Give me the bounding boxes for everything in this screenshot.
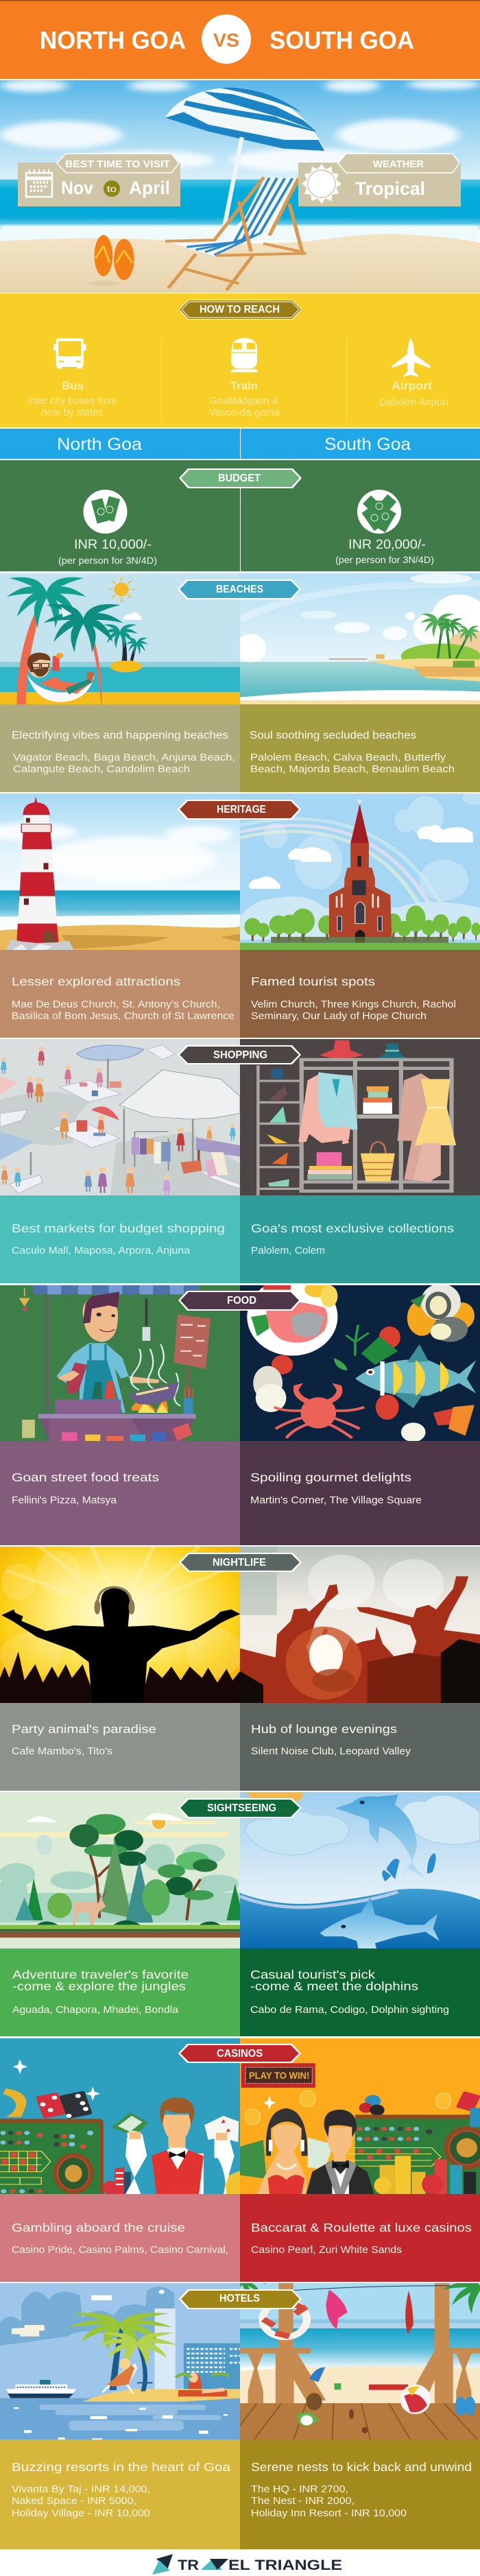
text panel: north food (0, 1441, 240, 1545)
text panel: north shopping: Best markets for budget shopping (12, 1221, 225, 1235)
crowd silhouettes (240, 1576, 480, 1703)
illustration: dj silhouette (0, 1547, 240, 1703)
illustration: resort and cruise ship (0, 2283, 240, 2440)
text panel: north hotels: Vivanta By Taj - INR 14,000, (12, 2484, 150, 2495)
church (329, 799, 392, 944)
text panel: south food (240, 1441, 480, 1545)
text: bus (27, 379, 117, 418)
money and cards (112, 2112, 239, 2142)
text panel: south heritage (240, 950, 480, 1038)
illustration: lounge crowd (240, 1547, 480, 1703)
dice (456, 2091, 480, 2127)
section: budget (0, 460, 480, 571)
awning (33, 1285, 199, 1295)
umbrella (165, 87, 324, 151)
text panel: north nightlife: Cafe Mambo's, Tito's (12, 1746, 112, 1757)
horseshoe (3, 2088, 26, 2117)
icon: calendar (26, 169, 52, 197)
info box: weather: Tropical (355, 178, 425, 199)
text: north budget (58, 538, 157, 566)
text: bus: Bus (62, 379, 84, 392)
illustration: lighthouse on beach (0, 794, 240, 950)
banner: hotels (179, 2289, 302, 2309)
hanging clothes (405, 2291, 413, 2334)
text panel: south sightseeing: Cabo de Rama, Codigo, Dolphin sighting (250, 2005, 449, 2016)
text panel: north food: Goan street food treats (12, 1470, 159, 1484)
text panel: south nightlife: Hub of lounge evenings (251, 1722, 397, 1736)
table (348, 2114, 480, 2194)
coins (245, 2090, 451, 2125)
flip flops (455, 2396, 475, 2416)
vendor (57, 1291, 159, 1413)
text panel: south heritage: Velim Church, Three Kings Church, Rachol (251, 999, 456, 1010)
sun (108, 577, 135, 602)
counter (22, 1400, 196, 1441)
banner: sightseeing (178, 1798, 302, 1818)
wheel (444, 2126, 480, 2169)
clothes rack (132, 1132, 171, 1171)
mats and goods (0, 1045, 240, 1193)
banner: heritage (178, 800, 301, 820)
heading: south goa: South Goa (324, 435, 411, 454)
text: train (209, 379, 280, 418)
text: airport: Dabolim Airport (379, 397, 448, 408)
deck floor (240, 2403, 480, 2440)
illustration: street market (0, 1039, 240, 1195)
text panel: south food: Spoiling gourmet delights (250, 1470, 411, 1484)
banner: shopping: SHOPPING (213, 1049, 267, 1061)
text panel: south sightseeing: -come & meet the dolphins (250, 1979, 418, 1993)
sand island (83, 2389, 240, 2402)
splash (382, 1853, 436, 1881)
wok and flames (128, 1382, 179, 1413)
text panel: north casinos: Casino Pride, Casino Palms, Casino Carnival, (12, 2245, 228, 2256)
text panel: north beaches (0, 704, 240, 792)
text panel: north hotels: Naked Space - INR 5000, (12, 2496, 136, 2507)
banner: hotels: HOTELS (219, 2293, 260, 2304)
balusters and posts (240, 2283, 480, 2403)
banner: sightseeing: SIGHTSEEING (207, 1802, 276, 1814)
hats (320, 1040, 407, 1058)
text panel: south heritage: Seminary, Our Lady of Hope Church (251, 1011, 427, 1022)
steam (131, 1344, 180, 1406)
text: airport (379, 379, 448, 408)
folded clothes and bag (307, 1142, 395, 1182)
chips (103, 2167, 240, 2195)
section: casinos (0, 2038, 480, 2282)
text panel: south sightseeing (240, 1948, 480, 2036)
tomatoes and mozzarella (253, 1355, 399, 1420)
deer (73, 1889, 106, 1925)
text: airport: Airport (392, 379, 432, 392)
trees (244, 905, 480, 942)
text: north budget: (per person for 3N/4D) (58, 555, 157, 566)
icon: bus (53, 337, 431, 377)
man (306, 2110, 374, 2194)
banner: nightlife: NIGHTLIFE (213, 1557, 266, 1569)
coconut trees (7, 568, 123, 704)
section: shopping (0, 1039, 480, 1283)
info box: weather (298, 154, 461, 206)
pier (329, 654, 385, 659)
text panel: north food: Fellini's Pizza, Matsya (12, 1495, 117, 1506)
text panel: south shopping (240, 1195, 480, 1283)
icon: sun (302, 164, 341, 204)
coin and chip stacks (374, 2156, 476, 2195)
illustration: church with rainbow (240, 794, 480, 950)
text: bus: near by states (41, 407, 103, 418)
text: bus: Inter city buses from (27, 396, 117, 407)
text panel: south beaches: Beach, Majorda Beach, Benaulim Beach (250, 764, 455, 775)
heading: north goa: North Goa (57, 435, 142, 454)
text panel: south shopping: Goa's most exclusive collections (251, 1221, 454, 1235)
text: train: GoaMadgaon & (210, 396, 278, 407)
chip stack (359, 2095, 385, 2116)
woman (257, 2108, 308, 2194)
mussels and lemons (407, 1284, 475, 1342)
flip flops (95, 235, 134, 280)
text panel: north beaches: Vagator Beach, Baga Beach, Anjuna Beach, (13, 752, 235, 763)
banner: casinos: CASINOS (217, 2048, 263, 2060)
island (368, 609, 480, 681)
illustration: dolphins (240, 1792, 480, 1948)
sun hat (326, 2289, 348, 2330)
logo: travel triangle (152, 2554, 342, 2575)
banner: casinos (178, 2044, 301, 2063)
ship (6, 2380, 77, 2398)
section: nightlife (0, 1547, 480, 1791)
text panel: north beaches: Electrifying vibes and happening beaches (12, 730, 228, 741)
dj (1, 1587, 240, 1703)
illustration: secluded beach (240, 573, 480, 704)
banner: food: FOOD (227, 1295, 256, 1307)
text panel: north sightseeing (0, 1948, 240, 2036)
beach ball (400, 2385, 431, 2414)
wardrobe frame (258, 1060, 451, 1195)
banner: how to reach (179, 300, 302, 320)
text panel: north heritage: Lesser explored attractions (12, 975, 180, 988)
icon: money north (84, 490, 128, 534)
illustration: street food vendor (0, 1285, 240, 1441)
section: beaches (0, 568, 480, 792)
banner: nightlife (179, 1553, 302, 1572)
main trees (15, 1814, 240, 1922)
bunting (62, 1423, 192, 1441)
banner: beaches (178, 580, 301, 599)
sea (0, 2398, 240, 2440)
section: how to reach (0, 294, 480, 427)
tomato and herbs (334, 1325, 400, 1370)
dice (36, 2091, 93, 2119)
logo: travel triangle: TR (178, 2557, 199, 2573)
background trees (0, 1844, 240, 1922)
sunbathers (103, 2359, 230, 2396)
sea (240, 1889, 480, 1948)
banner: food (178, 1291, 301, 1311)
banner: budget (179, 468, 302, 488)
section: sightseeing (0, 1792, 480, 2036)
illustration: wardrobe (240, 1039, 480, 1195)
text panel: north casinos (0, 2194, 240, 2282)
sparkles (13, 2060, 100, 2101)
info box: best time to visit: to (107, 184, 117, 194)
text panel: south casinos: Baccarat & Roulette at luxe casinos (251, 2221, 472, 2234)
hammock with man (27, 653, 95, 702)
text: south budget: INR 20,000/- (348, 538, 426, 552)
section: hotels (0, 2267, 480, 2549)
ground (0, 1920, 240, 1948)
text panel: south hotels: Holiday Inn Resort - INR 10,000 (251, 2508, 407, 2519)
text panel: north nightlife: Party animal's paradise (12, 1722, 156, 1736)
info box: best time to visit (18, 154, 180, 206)
text panel: south beaches (240, 704, 480, 792)
banner: beaches: BEACHES (216, 584, 263, 595)
text panel: south shopping: Palolem, Colem (251, 1245, 325, 1256)
clouds (245, 1796, 480, 1855)
text panel: south nightlife (240, 1703, 480, 1791)
shoppers (1, 1047, 236, 1196)
life buoy (263, 2302, 307, 2337)
palm leaves (217, 2267, 480, 2314)
text panel: south nightlife: Silent Noise Club, Leopard Valley (251, 1746, 411, 1757)
illustration: man in hammock under palms (0, 573, 240, 704)
banner: how to reach: HOW TO REACH (200, 304, 280, 315)
plate with salmon (247, 1278, 337, 1356)
text panel: south hotels (240, 2440, 480, 2549)
cloud shapes (0, 2287, 174, 2346)
text: south budget: (per person for 3N/4D) (335, 554, 434, 565)
crab (293, 1383, 342, 1429)
beach items (298, 2368, 408, 2426)
dealer (125, 2097, 235, 2194)
play to win sign (241, 2063, 315, 2088)
illustration: casino couple (240, 2038, 480, 2194)
text panel: south hotels: The Nest - INR 2000, (251, 2496, 355, 2507)
jacket and coat (298, 1072, 357, 1144)
hero beach scene (0, 80, 480, 293)
banner: shopping (178, 1045, 301, 1064)
illustration: casino dealer (0, 2038, 240, 2194)
text panel: south sightseeing: Casual tourist's pick (250, 1968, 375, 1981)
text panel: north sightseeing: Adventure traveler's favorite (12, 1968, 189, 1981)
text panel: north heritage (0, 950, 240, 1038)
dress and coat (397, 1073, 456, 1182)
text panel: north nightlife (0, 1703, 240, 1791)
text panel: north hotels: Holiday Village - INR 10,000 (12, 2508, 150, 2519)
info box: best time to visit: April (129, 178, 170, 198)
sign (174, 1315, 211, 1397)
illustration: beach from balcony (240, 2283, 480, 2440)
icon: airplane (392, 338, 430, 377)
vs badge (202, 14, 251, 64)
title: south goa: SOUTH GOA (269, 26, 414, 54)
logo: travel triangle: EL TRIANGLE (228, 2557, 342, 2573)
text: south budget (335, 538, 434, 565)
text panel: south heritage: Famed tourist spots (251, 975, 375, 988)
icon: train (230, 338, 259, 372)
section: food (0, 1278, 480, 1545)
deck chair (165, 177, 306, 290)
text panel: south beaches: Soul soothing secluded beaches (250, 730, 416, 741)
buildings (154, 2309, 240, 2389)
palm trees (67, 2306, 177, 2392)
peppers and garlic (401, 1405, 475, 1442)
info box: best time to visit: BEST TIME TO VISIT (65, 158, 170, 170)
umbrella pole (222, 137, 242, 239)
text panel: south casinos (240, 2194, 480, 2282)
parasols (77, 1045, 144, 1120)
leaping dolphin (335, 1795, 425, 1880)
text panel: north hotels: Buzzing resorts in the heart of Goa (12, 2460, 230, 2474)
text panel: north sightseeing: Aguada, Chapora, Mhadei, Bondla (12, 2005, 179, 2016)
text panel: north heritage: Basilica of Bom Jesus, Church of St Lawrence (12, 1011, 235, 1022)
illustration: seafood platter (240, 1285, 480, 1441)
roulette wheel (53, 2153, 94, 2194)
roulette table (0, 2119, 104, 2194)
header: north goa vs south goa (0, 0, 480, 79)
fish with lemons (355, 1344, 476, 1408)
lemons on plate (263, 1281, 337, 1307)
section: heritage (0, 791, 480, 1038)
text panel: north beaches: Calangute Beach, Candolim Beach (13, 764, 190, 775)
text panel: north shopping (0, 1195, 240, 1283)
text panel: north shopping: Caculo Mall, Maposa, Arpora, Anjuna (12, 1245, 191, 1256)
icon: money south (357, 490, 401, 534)
banner: budget: BUDGET (218, 473, 261, 484)
title: north goa: NORTH GOA (40, 26, 186, 54)
text: train: Train (230, 379, 258, 392)
text panel: north hotels (0, 2440, 240, 2549)
play to win sign: PLAY TO WIN! (249, 2070, 309, 2081)
text panel: south hotels: Serene nests to kick back and unwind (251, 2460, 472, 2474)
text: train: Vasco-da-gama (209, 407, 280, 418)
small palm island (102, 620, 148, 672)
column headings bar (0, 429, 480, 459)
vs badge: VS (213, 29, 239, 51)
lens flare (286, 1627, 362, 1700)
text: north budget: INR 10,000/- (74, 538, 152, 552)
boxes (363, 1086, 392, 1114)
text panel: north sightseeing: -come & explore the jungles (12, 1979, 186, 1993)
info box: weather: WEATHER (373, 158, 424, 170)
text panel: north heritage: Mae De Deus Church, St. Antony's Church, (12, 999, 220, 1010)
text panel: north casinos: Gambling aboard the cruise (12, 2221, 185, 2234)
crowd (0, 1651, 240, 1703)
lighthouse (6, 797, 74, 950)
banner: heritage: HERITAGE (217, 804, 266, 815)
text panel: south beaches: Palolem Beach, Calva Beach, Butterfly (250, 752, 446, 763)
swimming dolphin (320, 1898, 440, 1948)
text panel: south casinos: Casino Pearl, Zuri White Sands (251, 2245, 402, 2256)
illustration: jungle with deer (0, 1792, 240, 1948)
cash behind couple (240, 2140, 266, 2179)
info box: best time to visit: Nov (61, 178, 93, 198)
white tent (119, 1070, 240, 1168)
text panel: south food: Martin's Corner, The Village Square (250, 1495, 422, 1506)
shoes (267, 1069, 289, 1186)
text panel: south hotels: The HQ - INR 2700, (251, 2484, 348, 2495)
